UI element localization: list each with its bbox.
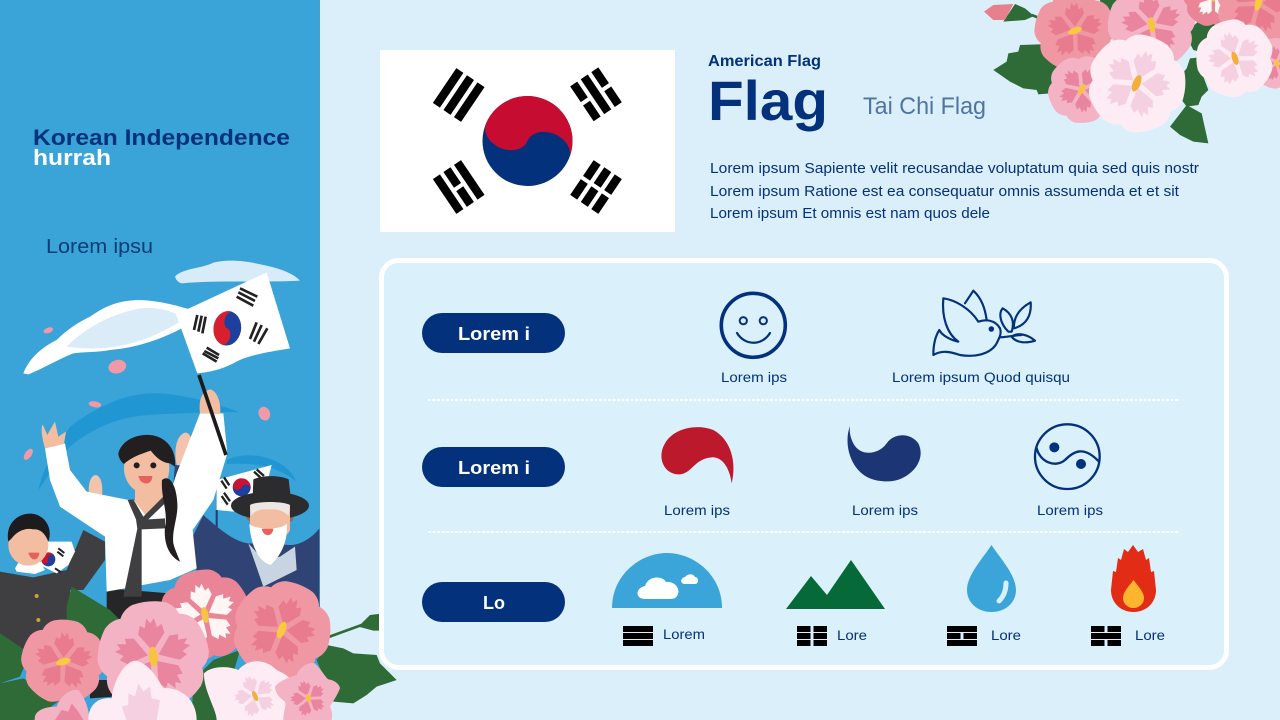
heading block: Flag xyxy=(708,69,828,132)
trigram: heaven xyxy=(623,626,653,646)
pale flower cut by the bottom edge xyxy=(204,661,293,720)
label: dove: Lorem ipsum Quod quisqu xyxy=(892,369,1070,385)
description text: Lorem ipsum Ratione est ea consequatur omnis assumenda et et sit xyxy=(710,184,1179,200)
icon: blue yin xyxy=(847,426,921,481)
flowers xyxy=(1017,0,1280,155)
old man's flag xyxy=(217,465,272,528)
description text: Lorem ipsum Et omnis est nam quos dele xyxy=(710,206,990,222)
large pale flower cut by the bottom edge xyxy=(88,661,197,720)
girl xyxy=(42,389,227,647)
description text: Lorem ipsum Sapiente velit recusandae voluptatum quia sed quis nostr xyxy=(710,161,1199,177)
panel: symbol meanings xyxy=(382,260,1226,668)
sidebar title: Korean Independence xyxy=(33,125,290,150)
heading block: Tai Chi Flag xyxy=(863,93,986,120)
label: smiley: Lorem ips xyxy=(721,369,787,385)
icon: mountains xyxy=(786,560,885,609)
waving flag and pole xyxy=(176,272,290,455)
upper cloud xyxy=(175,261,300,283)
label: blue yin: Lorem ips xyxy=(852,502,918,518)
label: heaven: Lorem xyxy=(663,626,705,642)
old man xyxy=(173,465,319,633)
label: earth: Lore xyxy=(837,627,867,643)
white cloud swoosh xyxy=(23,300,197,374)
small pink flower cut by the bottom edge xyxy=(35,690,90,720)
hibiscus flowers xyxy=(5,560,351,720)
leaves behind flowers xyxy=(0,587,397,720)
trigrams xyxy=(433,67,622,214)
illustration: people celebrating with flags and flowers xyxy=(0,261,407,720)
row 3 label pill xyxy=(422,582,565,622)
icon: flame xyxy=(1111,545,1156,612)
sidebar subtitle: Lorem ipsu xyxy=(46,236,153,258)
row 3 label pill: Lo xyxy=(483,593,505,613)
sidebar title xyxy=(33,125,290,170)
panel: left sidebar xyxy=(0,0,320,720)
blue swoosh xyxy=(38,393,240,490)
icon: sky xyxy=(612,553,722,608)
label: fire trigram: Lore xyxy=(991,627,1021,643)
trigram: water xyxy=(1091,626,1121,646)
icon: dove with olive branch xyxy=(933,291,1035,356)
pink flower cut by the bottom edge xyxy=(275,663,340,720)
leaves xyxy=(993,0,1223,143)
decoration: top right flowers xyxy=(984,0,1280,155)
South Korean flag xyxy=(380,50,675,232)
row 2 label pill: Lorem i xyxy=(458,458,530,478)
row 1 label pill xyxy=(422,313,565,353)
trigram: fire xyxy=(947,626,977,646)
label: yin yang: Lorem ips xyxy=(1037,502,1103,518)
flower bud xyxy=(325,613,407,638)
heading block: American Flag xyxy=(708,53,821,70)
heading block xyxy=(708,53,986,132)
icon: yin yang outline xyxy=(1035,424,1100,489)
icon: red yang xyxy=(661,427,733,483)
icon: smiley xyxy=(721,293,785,357)
row 2 label pill xyxy=(422,447,565,487)
label: water trigram: Lore xyxy=(1135,627,1165,643)
background hands xyxy=(89,433,193,498)
taegeuk xyxy=(468,82,587,200)
bud xyxy=(984,4,1048,22)
label: red yang: Lorem ips xyxy=(664,502,730,518)
description text xyxy=(710,161,1199,222)
row 1 label pill: Lorem i xyxy=(458,324,530,344)
trigram: earth xyxy=(797,626,827,646)
sidebar title: hurrah xyxy=(33,145,111,170)
boy with flag xyxy=(0,514,105,653)
icon: water drop xyxy=(967,545,1016,612)
falling petals xyxy=(22,326,272,461)
